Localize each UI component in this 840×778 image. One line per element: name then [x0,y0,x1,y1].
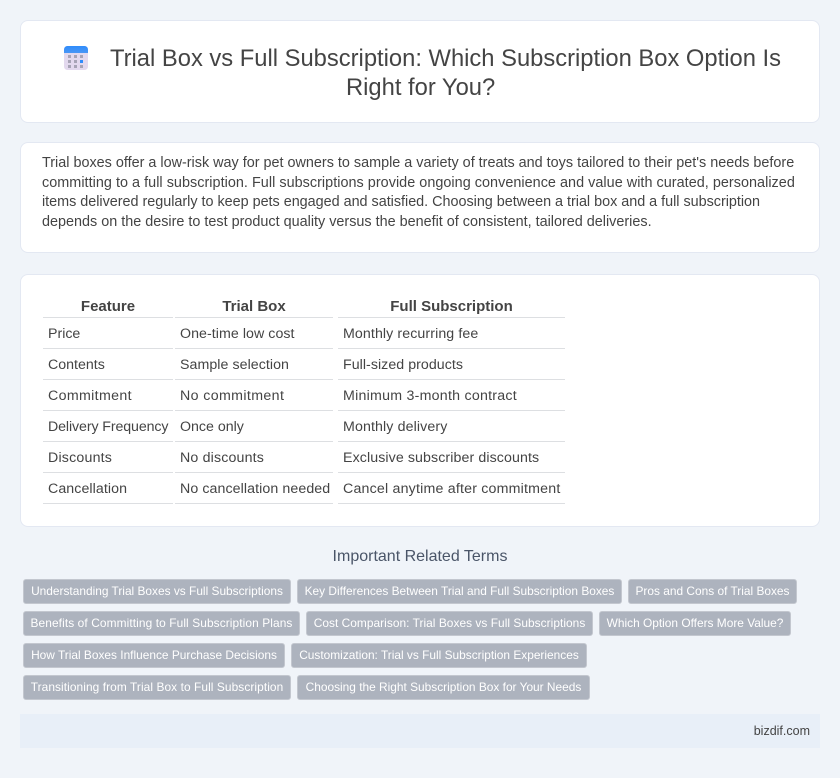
comparison table panel [20,274,820,527]
table header: Trial Box [222,298,286,315]
row: commitment: Commitment [48,388,132,404]
chip [23,579,291,604]
row: price: Price [48,326,80,342]
chip [297,579,622,604]
chip [23,675,291,700]
table header [81,298,513,315]
footer source: bizdif.com [754,724,810,738]
chip [23,643,285,668]
row: delivery frequency [48,419,448,435]
row: discounts: Exclusive subscriber discounts [343,450,539,466]
row: discounts: Discounts [48,450,112,466]
intro paragraph: items delivered regularly to keep pets engaged and satisfied. Choosing between a trial box and a full subscription [42,194,760,210]
row: contents: Sample selection [180,357,289,373]
intro paragraph [42,155,795,230]
row: commitment: No commitment [180,388,284,404]
chip: Which Option Offers More Value? [607,616,783,630]
title: Trial Box vs Full Subscription: Which Subscription Box Option Is [110,45,781,72]
chip [291,643,587,668]
chip: Benefits of Committing to Full Subscription Plans [30,616,292,630]
row: cancellation [48,481,561,497]
table header: Feature [81,298,135,315]
row: contents [48,357,463,373]
chip [297,675,590,700]
row: price: Monthly recurring fee [343,326,478,342]
footer bar [20,714,820,748]
intro paragraph: depends on the desire to test product quality versus the benefit of consistent, tailored deliveries. [42,214,652,230]
title: Right for You? [346,74,495,101]
row: price [48,326,478,342]
row: contents: Full-sized products [343,357,463,373]
chip: Key Differences Between Trial and Full Subscription Boxes [305,584,614,598]
chip: Customization: Trial vs Full Subscription Experiences [299,648,579,662]
title [110,45,781,101]
chip: Understanding Trial Boxes vs Full Subscriptions [31,584,283,598]
icon: calendar [64,46,88,70]
row: delivery frequency: Once only [180,419,244,435]
row: delivery frequency: Delivery Frequency [48,419,168,435]
row: delivery frequency: Monthly delivery [343,419,447,435]
intro text panel [20,142,820,253]
row: discounts: No discounts [180,450,264,466]
intro paragraph: Trial boxes offer a low-risk way for pet owners to sample a variety of treats and toys tailored to their pet's needs before [42,155,794,171]
row: commitment [48,388,517,404]
chip [23,611,300,636]
intro paragraph: committing to a full subscription. Full subscriptions provide ongoing convenience and value with curated, personalized [42,174,795,190]
chip [599,611,791,636]
chip: Transitioning from Trial Box to Full Subscription [31,680,283,694]
related terms chips [23,579,797,700]
chip: Choosing the Right Subscription Box for Your Needs [306,680,581,694]
table header: Full Subscription [390,298,513,315]
chip [628,579,797,604]
chip [306,611,593,636]
chip: How Trial Boxes Influence Purchase Decisions [31,648,277,662]
row: discounts [48,450,539,466]
related terms heading: Important Related Terms [333,548,507,565]
header card [20,20,820,123]
row: price: One-time low cost [180,326,295,342]
row: cancellation: Cancellation [48,481,127,497]
chip: Cost Comparison: Trial Boxes vs Full Subscriptions [314,616,585,630]
row: cancellation: No cancellation needed [180,481,330,497]
row: cancellation: Cancel anytime after commitment [343,481,561,497]
row: commitment: Minimum 3-month contract [343,388,517,404]
chip: Pros and Cons of Trial Boxes [636,584,790,598]
row: contents: Contents [48,357,105,373]
